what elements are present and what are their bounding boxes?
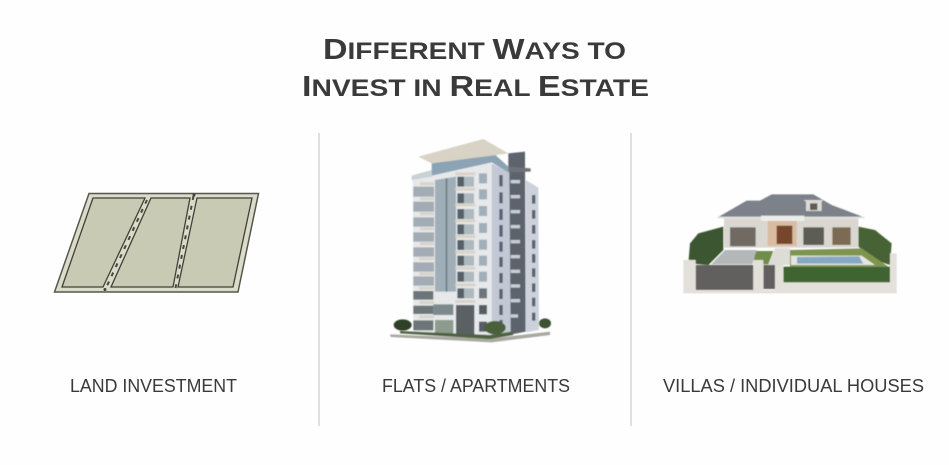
central glazing: [435, 177, 456, 292]
icon: apartment tower: [390, 139, 551, 342]
icon: villa with pool: [683, 194, 897, 293]
icon: land plot divided into three parcels: [54, 194, 258, 292]
lawn: [790, 248, 888, 267]
hedges: [688, 227, 723, 265]
label: flats / apartments: FLATS / APARTMENTS: [382, 376, 570, 396]
label: villas / individual houses: VILLAS / INDIVIDUAL HOUSES: [663, 376, 924, 396]
label: land investment: LAND INVESTMENT: [70, 376, 237, 396]
title: DIFFERENT WAYS TO: [323, 34, 626, 66]
driveway and steps: [711, 250, 757, 264]
side and front faces: [492, 163, 511, 338]
far wing and dark core: [508, 152, 526, 335]
roof: [718, 194, 864, 217]
swimming pool: [791, 256, 875, 265]
side balconies: [511, 180, 520, 318]
title: INVEST IN REAL ESTATE: [302, 71, 649, 103]
side windows: [499, 175, 535, 328]
trees and ground: [390, 332, 550, 342]
title: [302, 34, 649, 103]
penthouse glass and roof: [432, 152, 508, 176]
front wall and gate: [696, 265, 753, 290]
middle balcony stack: [457, 177, 464, 298]
front windows: [479, 173, 487, 332]
left balcony stack: [413, 187, 434, 330]
walls: [724, 218, 858, 248]
